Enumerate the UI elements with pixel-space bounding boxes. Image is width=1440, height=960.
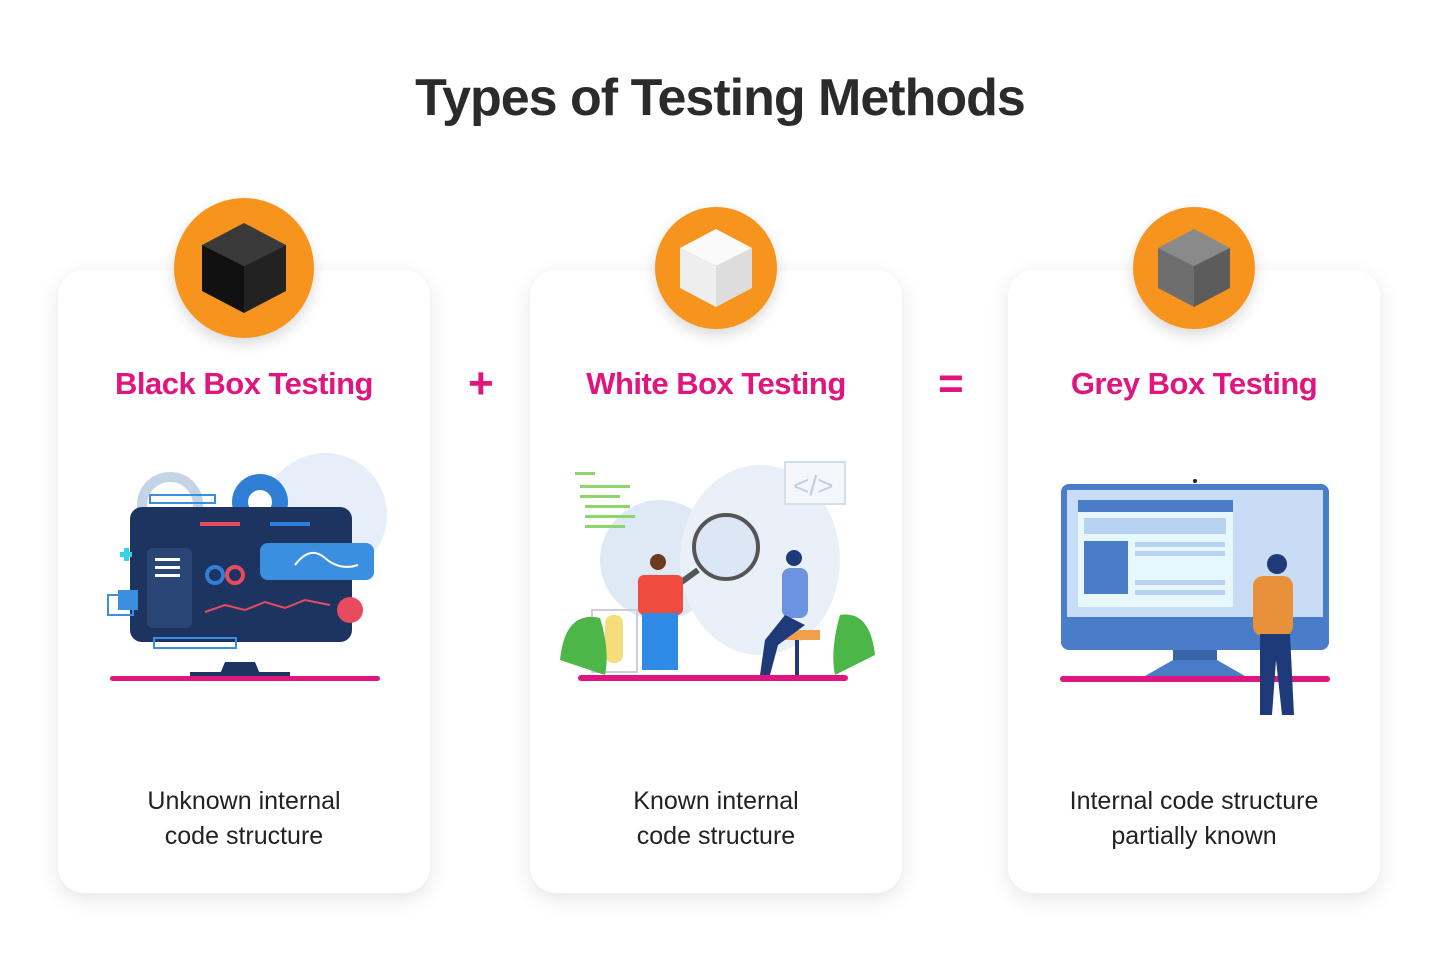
- icon: black cube circle: [174, 198, 314, 338]
- text: black box description: [147, 787, 341, 850]
- illustration: white box inspection: [560, 461, 875, 681]
- text: grey box description: Internal code structure: [1070, 787, 1318, 815]
- text: black box description: Unknown internal: [147, 787, 341, 815]
- text: grey box description: [1070, 787, 1318, 850]
- panel: black box: [58, 270, 430, 893]
- text: black box description: code structure: [165, 822, 323, 850]
- heading: grey box: Grey Box Testing: [1071, 366, 1317, 401]
- icon: white cube circle: [655, 207, 777, 329]
- text: white box description: [633, 787, 799, 850]
- illustration: black box dashboard: [107, 453, 387, 681]
- panel: white box: [530, 270, 902, 893]
- panel: grey box: [1008, 270, 1380, 893]
- illustration: grey box monitor: [1060, 479, 1330, 715]
- text: grey box description: partially known: [1111, 822, 1277, 850]
- title: Types of Testing Methods: [415, 69, 1025, 127]
- text: white box description: Known internal: [633, 787, 799, 815]
- operator equals: =: [938, 359, 964, 408]
- operator plus: +: [468, 359, 494, 408]
- text: white box description: code structure: [637, 822, 795, 850]
- heading: white box: White Box Testing: [586, 366, 846, 401]
- illustration: white box inspection: </>: [793, 470, 833, 501]
- icon: grey cube circle: [1133, 207, 1255, 329]
- heading: black box: Black Box Testing: [115, 366, 373, 401]
